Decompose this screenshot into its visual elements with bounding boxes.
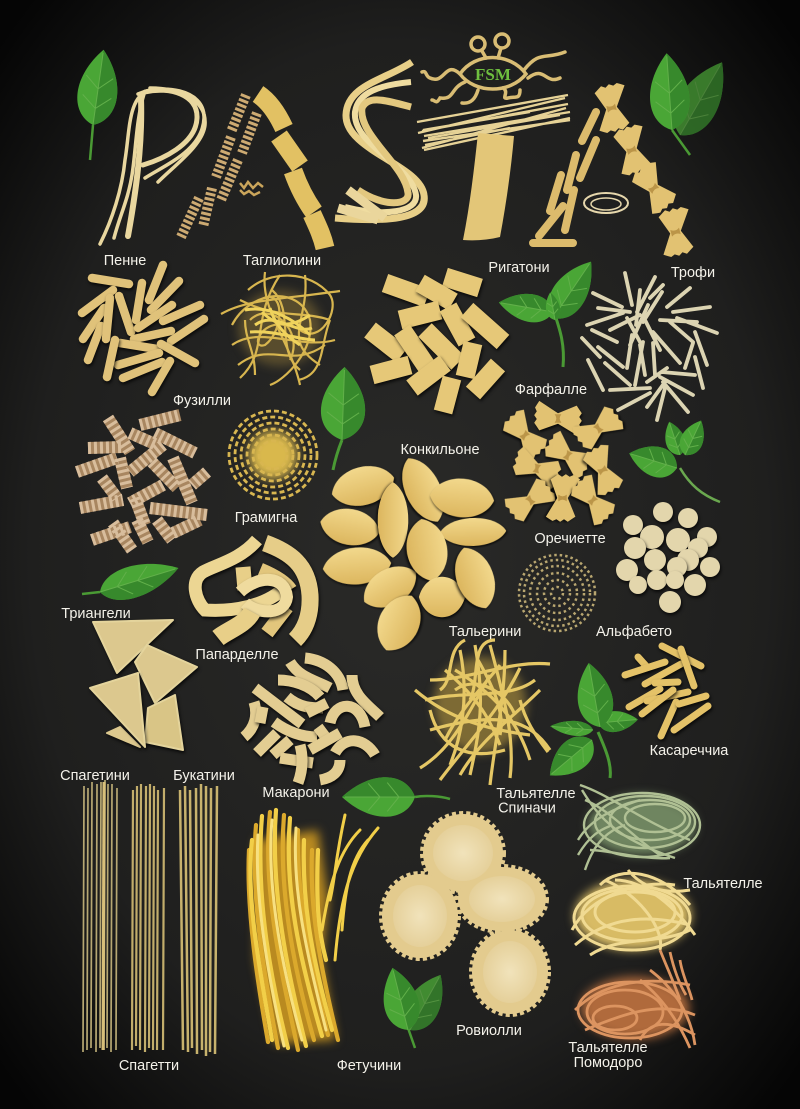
letter A of penne and farfalle bbox=[533, 80, 700, 260]
FSM flying spaghetti monster logo bbox=[422, 34, 565, 103]
letter P bbox=[100, 88, 205, 244]
basil leaf near macaroni label bbox=[342, 777, 450, 817]
pappardelle bbox=[195, 540, 310, 640]
basil leaves top right bbox=[647, 52, 739, 155]
FSM lettering: FSM bbox=[475, 65, 511, 84]
green spinach tagliatelle nest bbox=[578, 785, 700, 870]
basil leaves right of farfalle bbox=[625, 416, 720, 502]
label: spaghetti: Спагетти bbox=[119, 1058, 179, 1074]
trofi bbox=[582, 273, 717, 420]
label: tomato tagliatelle: Помодоро bbox=[574, 1055, 642, 1071]
labels bbox=[60, 253, 763, 1074]
tagliolini nest bbox=[221, 272, 340, 385]
casarecce bbox=[625, 646, 708, 736]
spaghettini bundle bbox=[83, 780, 117, 1052]
tomato tagliatelle nest bbox=[575, 950, 695, 1048]
label: gramigna: Грамигна bbox=[235, 510, 298, 526]
ravioli bbox=[382, 814, 548, 1014]
label: macaroni: Макарони bbox=[262, 785, 330, 801]
basil leaf top left bbox=[73, 47, 123, 160]
farfalle bbox=[496, 400, 630, 529]
tagliarini bbox=[415, 640, 550, 785]
basil leaves bottom bbox=[376, 964, 455, 1048]
label: spaghettini: Спагетини bbox=[60, 768, 130, 784]
orecchiette bbox=[616, 502, 720, 613]
label: spinach tagliatelle: Тальятелле bbox=[496, 786, 576, 802]
label: ravioli: Ровиолли bbox=[456, 1023, 522, 1039]
letter A of fusilli and rigatoni bbox=[181, 94, 325, 248]
yellow tagliatelle nest bbox=[572, 870, 695, 955]
triangoli bbox=[90, 620, 197, 750]
bucatini bundle bbox=[180, 784, 217, 1056]
letter T of spaghetti and rigatone bbox=[417, 95, 570, 240]
fusilli bbox=[77, 415, 207, 550]
label: bucatini: Букатини bbox=[173, 768, 235, 784]
label: penne: Пенне bbox=[104, 253, 146, 269]
label: tagliatelle: Тальятелле bbox=[683, 876, 763, 892]
label: tagliolini: Таглиолини bbox=[243, 253, 321, 269]
basil leaves near casarecce bbox=[540, 660, 639, 787]
label: trofi: Трофи bbox=[671, 265, 715, 281]
penne bbox=[82, 265, 204, 392]
basil leaf above triangoli bbox=[82, 553, 183, 607]
basil leaves near farfalle label bbox=[496, 252, 605, 367]
label: triangoli: Триангели bbox=[61, 606, 131, 622]
label: alfabeto: Альфабето bbox=[596, 624, 672, 640]
label: fusilli: Фузилли bbox=[173, 393, 231, 409]
spaghetti bundle bbox=[132, 784, 164, 1052]
fettuccine bbox=[249, 810, 378, 1050]
title word PASTA made of pasta bbox=[100, 62, 700, 260]
label: orecchiette: Оречиетте bbox=[534, 531, 606, 547]
gramigna bbox=[229, 411, 317, 499]
label: tomato tagliatelle: Тальятелле bbox=[568, 1040, 648, 1056]
label: tagliarini: Тальерини bbox=[449, 624, 521, 640]
macaroni bbox=[244, 658, 380, 783]
label: spinach tagliatelle: Спиначи bbox=[498, 800, 556, 816]
label: fettuccine: Фетучини bbox=[337, 1058, 401, 1074]
label: conchiglie: Конкильоне bbox=[400, 442, 480, 458]
label: casarecce: Касареччиа bbox=[650, 743, 729, 759]
conchiglie shells bbox=[317, 451, 507, 659]
basil leaf near gramigna bbox=[320, 366, 367, 470]
label: farfalle: Фарфалле bbox=[515, 382, 587, 398]
letter S of ribbons bbox=[335, 62, 424, 220]
rigatoni bbox=[370, 277, 503, 412]
label: pappardelle: Папарделле bbox=[195, 647, 279, 663]
alfabeto small letters pasta bbox=[519, 555, 595, 631]
label: rigatoni: Ригатони bbox=[488, 260, 550, 276]
